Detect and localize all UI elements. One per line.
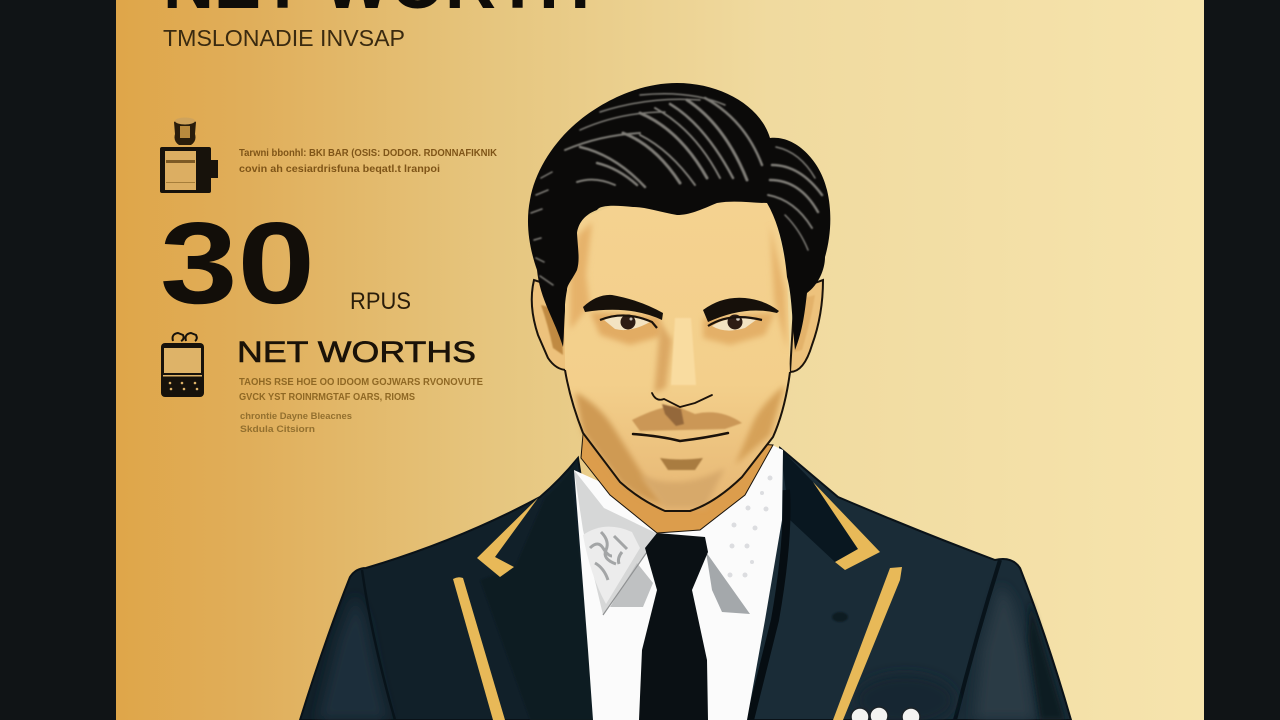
subtitle: TMSLONADIE INVSAP	[163, 25, 405, 51]
description text three: Skdula Citsiorn	[240, 424, 315, 435]
eyes	[600, 314, 762, 331]
nose and mouth	[633, 393, 728, 441]
shirt	[574, 445, 783, 720]
description text three: chrontie Dayne Bleacnes	[240, 411, 352, 422]
description text two: GVCK YST ROINRMGTAF OARS, RIOMS	[239, 392, 415, 403]
pocket square	[851, 707, 920, 720]
description text two: TAOHS RSE HOE OO IDOOM GOJWARS RVONOVUTE	[239, 377, 483, 388]
lapel piping	[453, 482, 902, 720]
eyebrows	[583, 295, 779, 322]
description text one: Tarwni bbonhl: BKI BAR (OSIS: DODOR. RDONNAFIKNIK	[239, 147, 497, 159]
description text one	[239, 147, 497, 175]
icon: jar on box	[160, 118, 218, 193]
face	[565, 195, 790, 511]
ears	[532, 280, 823, 372]
unit label: RPUS	[350, 288, 411, 315]
big number 30: 30	[160, 198, 315, 328]
description text two	[239, 377, 483, 403]
jacket	[300, 448, 1071, 720]
neck	[581, 434, 773, 533]
icon: device box	[161, 333, 204, 397]
description text three	[240, 411, 352, 435]
hair	[528, 83, 830, 350]
heading net worth: NET WORTHS	[237, 336, 476, 369]
tie	[639, 533, 708, 720]
portrait illustration	[300, 83, 1071, 720]
description text one: covin ah cesiardrisfuna beqatl.t lranpoi	[239, 163, 440, 175]
